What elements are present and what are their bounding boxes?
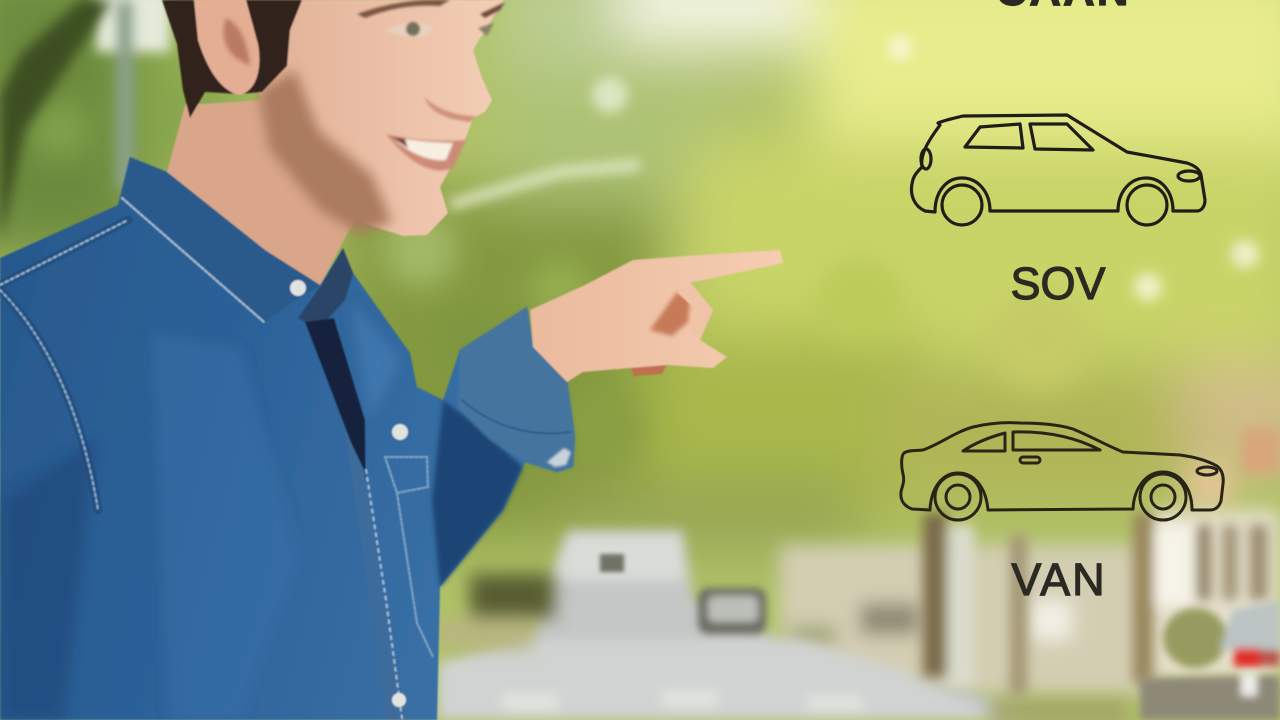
man: denim shirt <box>0 157 575 720</box>
parked silver car <box>698 588 766 634</box>
parked red car <box>1140 600 1280 720</box>
man: smile <box>386 134 466 171</box>
label: SOV: SOV <box>1010 258 1106 309</box>
man: cuff lining <box>547 448 571 467</box>
man: shirt shading <box>0 300 400 720</box>
man: placket band <box>345 430 407 720</box>
man: palm crease shadow <box>650 292 690 336</box>
distant car on the road <box>600 554 624 572</box>
roadside bush and verge <box>437 574 1130 720</box>
man: inner ear shadow <box>224 18 250 66</box>
tree trunks and house columns <box>923 428 1280 695</box>
man: ear <box>194 0 259 95</box>
man: collar right side <box>298 248 353 330</box>
man: hair <box>162 0 302 118</box>
trees at far left <box>0 0 112 245</box>
man: collar <box>120 157 320 323</box>
man: shirt buttons <box>290 280 408 707</box>
man: stitching seams <box>0 198 570 718</box>
man: face <box>240 0 504 236</box>
street-side houses and yards <box>780 510 1280 695</box>
man: rolled cuff <box>458 307 575 472</box>
man: open shirt placket shadow <box>305 318 378 610</box>
label: VAN: VAN <box>1011 554 1107 605</box>
icon: SUV outline <box>912 115 1205 225</box>
street lamp and blurred foliage highlights <box>96 0 1259 301</box>
man: nose shadow <box>424 97 476 122</box>
man: eyes and brows <box>357 0 505 37</box>
man pointing <box>0 0 783 720</box>
man: pointing hand <box>530 250 783 382</box>
icon: sedan outline <box>901 423 1223 520</box>
man: neck <box>167 100 360 285</box>
man: curled ring finger <box>630 362 668 376</box>
road <box>438 530 1030 720</box>
man: under-sleeve dark fold <box>432 400 523 587</box>
man: curled middle finger <box>677 284 713 340</box>
man: stubble shadow <box>258 70 392 234</box>
